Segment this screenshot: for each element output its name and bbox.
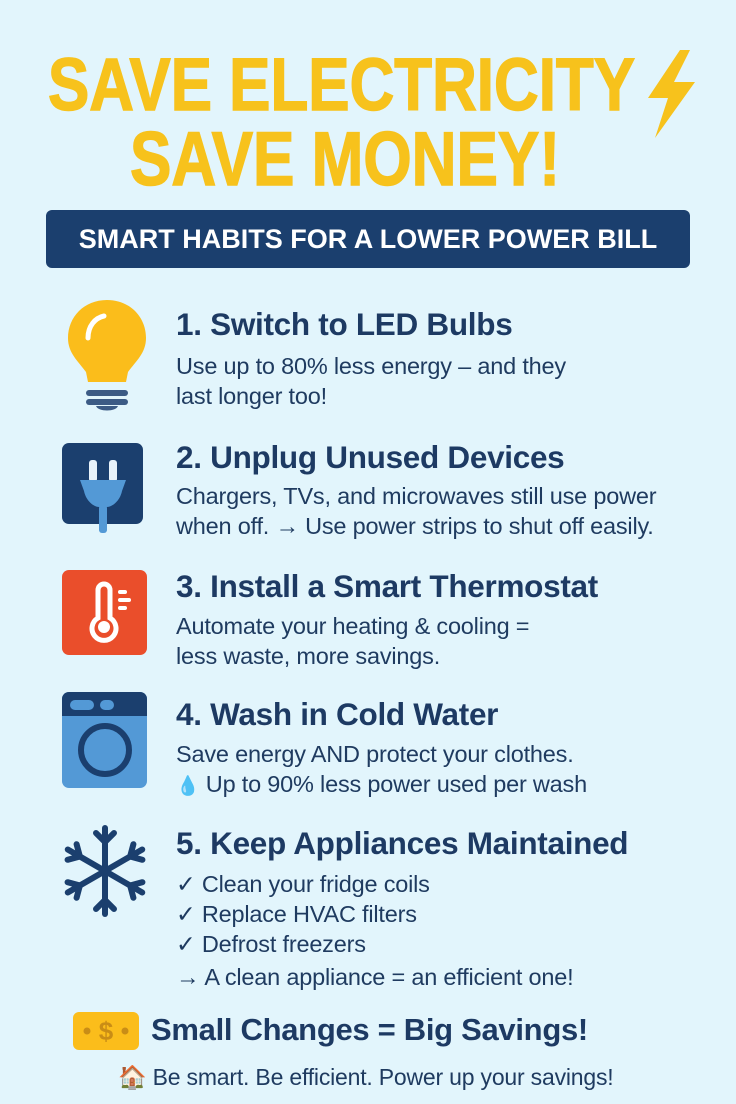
- item 5 text: 5. Keep Appliances Maintained: [176, 825, 628, 861]
- item 2 text: Chargers, TVs, and microwaves still use power: [176, 483, 656, 509]
- item 2 text: 2. Unplug Unused Devices: [176, 439, 564, 475]
- item 5 text: ✓ Defrost freezers: [176, 931, 366, 957]
- item 4 text: 💧 Up to 90% less power used per wash: [176, 771, 587, 797]
- item 5 text: → A clean appliance = an efficient one!: [176, 964, 573, 990]
- item 2 text: [176, 439, 656, 539]
- icon: money: [73, 1012, 139, 1050]
- icon: washing machine: [62, 692, 147, 788]
- item 5 text: ✓ Clean your fridge coils: [176, 871, 430, 897]
- icon: light bulb: [68, 300, 146, 410]
- item 5 text: [176, 825, 628, 990]
- footer tagline: 🏠 Be smart. Be efficient. Power up your savings!: [118, 1064, 613, 1090]
- item 1 text: 1. Switch to LED Bulbs: [176, 306, 512, 342]
- item 3 text: Automate your heating & cooling =: [176, 613, 529, 639]
- item 1 text: Use up to 80% less energy – and they: [176, 353, 566, 379]
- banner: SMART HABITS FOR A LOWER POWER BILL: [79, 224, 657, 254]
- item 2 text: when off. → Use power strips to shut off easily.: [176, 513, 654, 539]
- item 4 text: Save energy AND protect your clothes.: [176, 741, 574, 767]
- item 3 text: less waste, more savings.: [176, 643, 440, 669]
- item 4 text: 4. Wash in Cold Water: [176, 696, 498, 732]
- icon: snowflake: [64, 825, 146, 917]
- icon: thermometer: [62, 570, 147, 655]
- item 3 text: 3. Install a Smart Thermostat: [176, 568, 598, 604]
- item 1 text: [176, 306, 566, 409]
- icon: plug: [62, 443, 143, 533]
- title: [48, 43, 695, 200]
- icon: money: $: [99, 1016, 114, 1046]
- banner: [46, 210, 690, 268]
- item 3 text: [176, 568, 598, 669]
- item 4 text: [176, 696, 587, 797]
- item 5 text: ✓ Replace HVAC filters: [176, 901, 417, 927]
- footer heading: Small Changes = Big Savings!: [151, 1012, 588, 1047]
- title: SAVE MONEY!: [130, 117, 560, 200]
- item 1 text: last longer too!: [176, 383, 327, 409]
- title: SAVE ELECTRICITY: [48, 43, 635, 126]
